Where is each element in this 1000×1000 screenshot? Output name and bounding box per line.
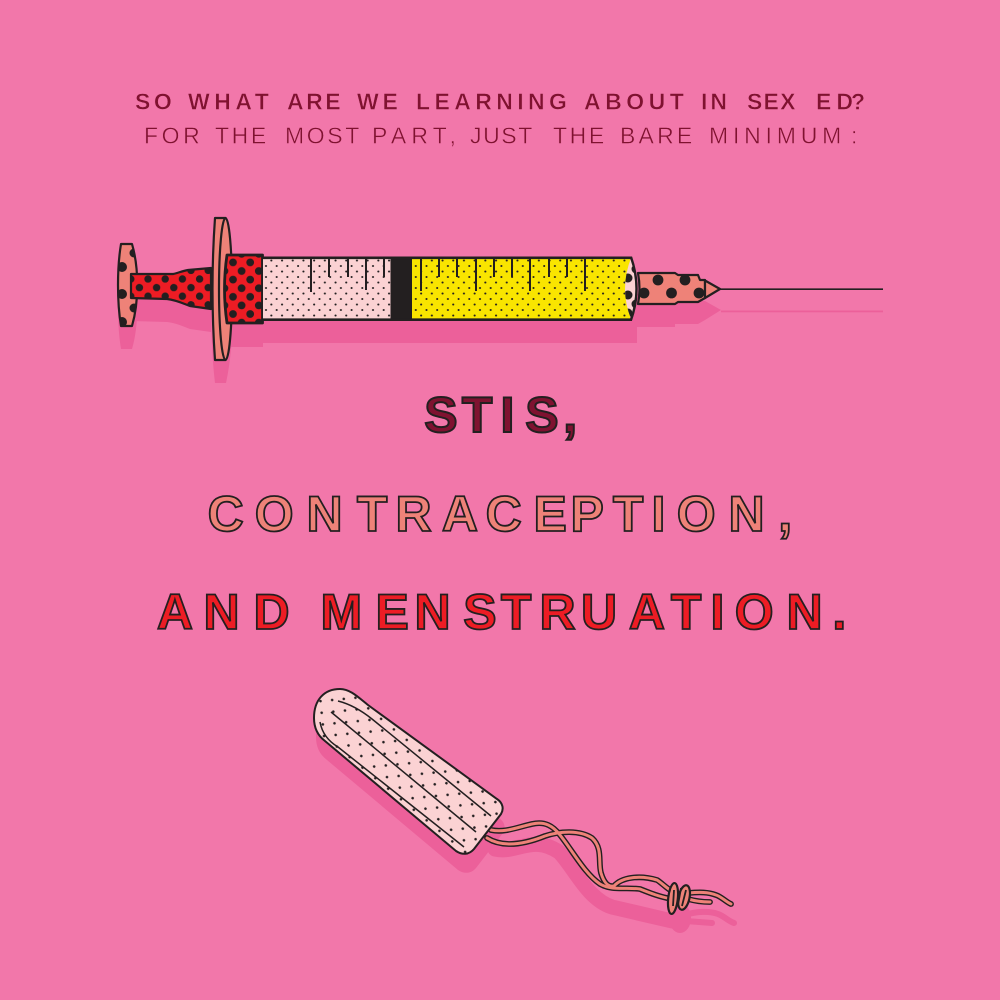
subheading: PART, [372, 122, 461, 148]
barrel end cap [625, 256, 638, 320]
heading: WHAT [188, 88, 273, 114]
text: contraception: CONTRACEPTION, [208, 486, 792, 542]
needle tip [705, 280, 720, 298]
barrel outline [263, 258, 632, 320]
heading: SEX [747, 88, 797, 114]
subheading: FOR [144, 122, 203, 148]
heading: ? [851, 88, 865, 114]
subheading: MOST [285, 122, 362, 148]
heading: IN [701, 88, 730, 114]
heading: ED [816, 88, 858, 114]
heading: LEARNING [416, 88, 571, 114]
heading: ABOUT [584, 88, 688, 114]
tampon ridges [320, 701, 491, 847]
tampon strings [487, 823, 731, 904]
plunger thumb rest [117, 244, 138, 327]
plunger rod [131, 268, 211, 309]
measurement ticks [311, 258, 585, 292]
subheading: THE [215, 122, 269, 148]
needle hub [638, 273, 705, 304]
needle [720, 288, 883, 290]
tampon [314, 689, 731, 914]
text: and menstruation: AND MENSTRUATION. [157, 584, 846, 640]
heading: ARE [287, 88, 343, 114]
tampon knot [667, 883, 692, 914]
heading [135, 88, 865, 114]
syringe shadow [118, 241, 883, 383]
syringe [117, 218, 883, 360]
barrel: pink section [263, 258, 391, 320]
black plunger seal [390, 257, 412, 321]
tampon body [314, 689, 503, 854]
heading: WE [357, 88, 402, 114]
subheading [144, 122, 857, 148]
barrel: yellow section [412, 258, 630, 320]
subheading: MINIMUM [709, 122, 846, 148]
subheading: : [851, 122, 857, 148]
subheading: BARE [620, 122, 695, 148]
text: STIS: STIS, [424, 387, 577, 443]
heading: SO [135, 88, 175, 114]
finger flange [212, 218, 232, 360]
collar [224, 255, 262, 323]
subheading: JUST [470, 122, 534, 148]
subheading: THE [553, 122, 607, 148]
tampon shadow [316, 708, 734, 933]
